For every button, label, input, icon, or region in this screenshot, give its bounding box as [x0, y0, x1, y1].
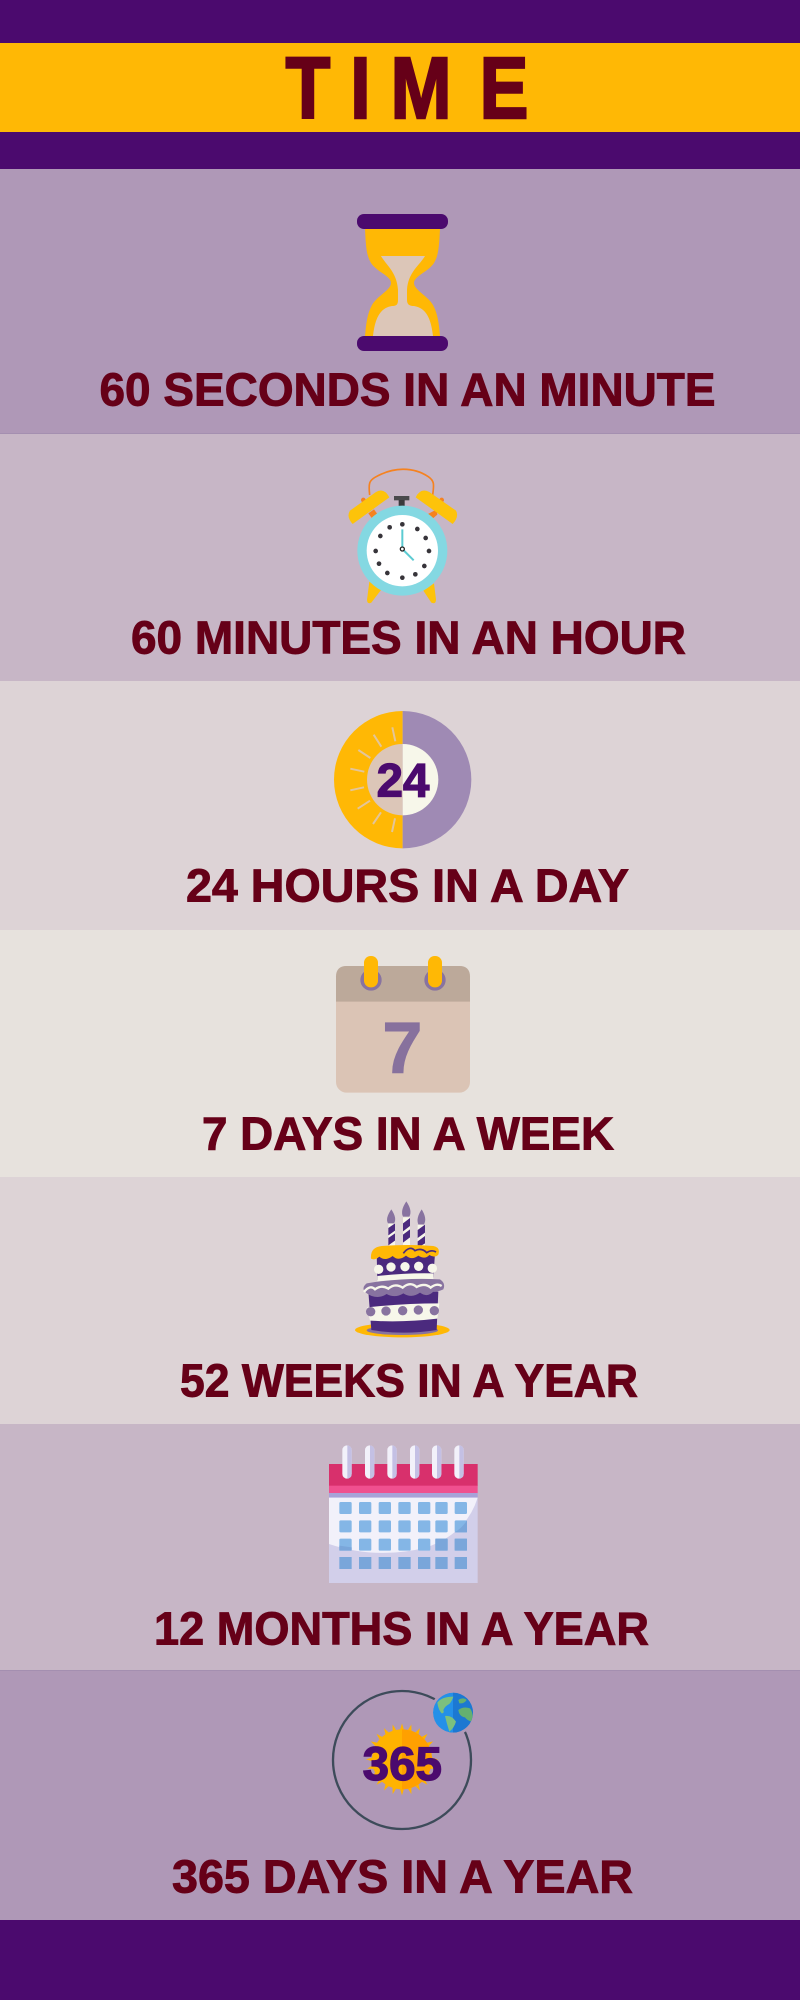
icon: birthday cake — [355, 1201, 450, 1337]
header band — [0, 0, 800, 169]
title: TIME — [286, 40, 528, 137]
label: 60 SECONDS IN AN MINUTE — [100, 364, 716, 416]
panel: 24 hours — [0, 681, 800, 930]
icon: alarm clock — [348, 469, 457, 603]
icon: monthly calendar — [329, 1445, 478, 1583]
icon: day and night dial: 24 — [377, 755, 430, 808]
panel: 52 weeks — [0, 1177, 800, 1424]
panel: 12 months — [0, 1424, 800, 1671]
panel: 7 days — [0, 930, 800, 1177]
icon: earth orbiting sun — [333, 1690, 476, 1829]
icon: weekly calendar — [336, 956, 470, 1093]
label: 52 WEEKS IN A YEAR — [180, 1354, 638, 1406]
panel: 60 seconds — [0, 169, 800, 434]
icon: weekly calendar: 7 — [382, 1008, 422, 1089]
label: 60 MINUTES IN AN HOUR — [131, 612, 686, 664]
icon: hourglass — [357, 214, 448, 351]
label: 7 DAYS IN A WEEK — [202, 1108, 614, 1160]
label: 365 DAYS IN A YEAR — [172, 1850, 633, 1902]
panel: 60 minutes — [0, 434, 800, 681]
icon: earth orbiting sun: 365 — [363, 1738, 442, 1791]
label: 12 MONTHS IN A YEAR — [154, 1602, 649, 1654]
icon: day and night dial — [334, 711, 471, 848]
footer band — [0, 1920, 800, 2000]
label: 24 HOURS IN A DAY — [186, 860, 629, 912]
panel: 365 days — [172, 1690, 633, 1894]
